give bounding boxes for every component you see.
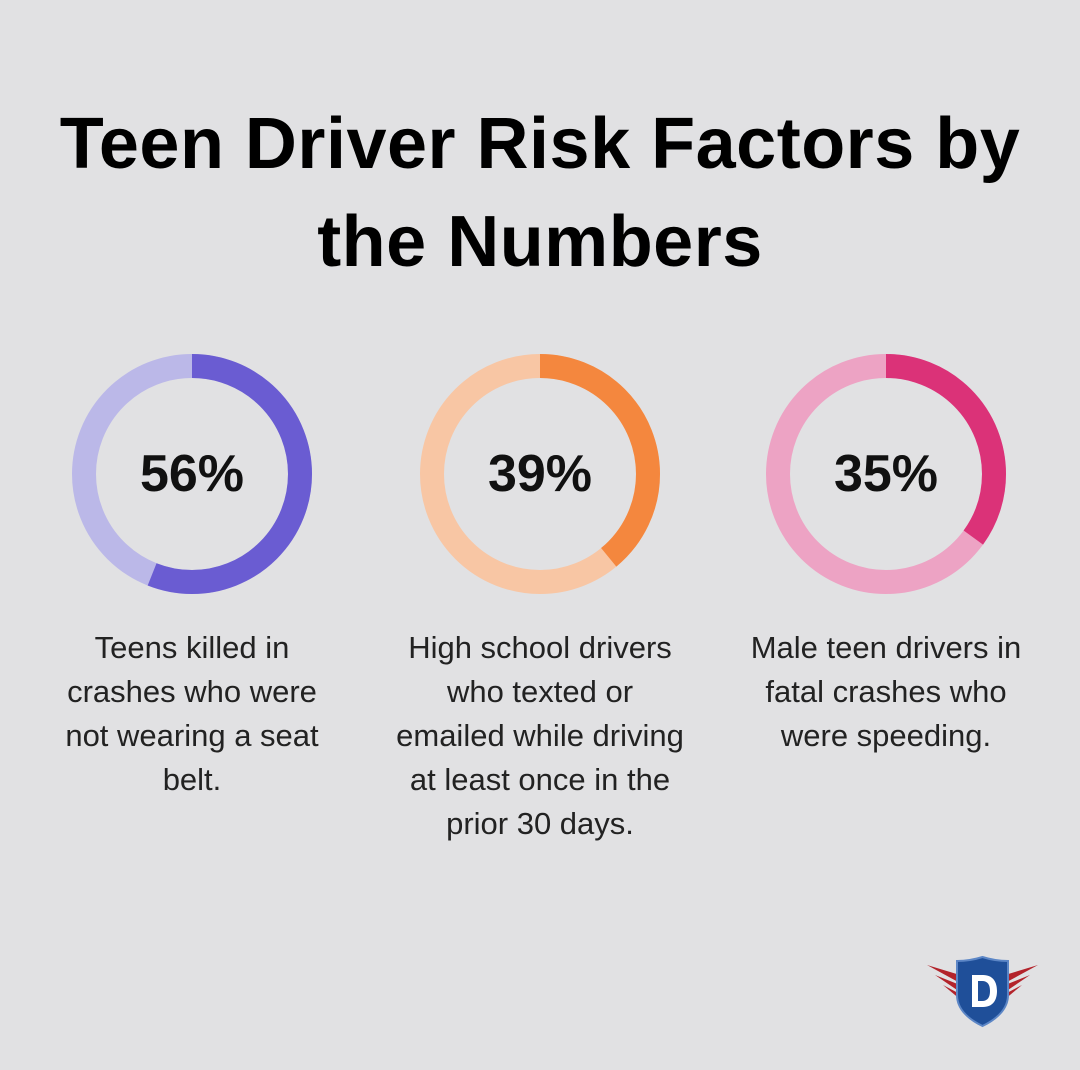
title: the Numbers (317, 202, 763, 282)
description: Male teen drivers in (751, 630, 1021, 665)
description: emailed while driving (396, 718, 684, 753)
description: who texted or (447, 674, 633, 709)
donut chart 35% (766, 354, 1006, 594)
description: fatal crashes who (765, 674, 1007, 709)
description (65, 630, 319, 797)
stat: texting (396, 354, 684, 841)
donut chart 56%: 56% (140, 445, 244, 503)
donut chart 39%: 39% (488, 445, 592, 503)
description: Teens killed in (95, 630, 289, 665)
stat: seat belt (65, 354, 319, 797)
stat: speeding (751, 354, 1021, 753)
description: belt. (163, 762, 221, 797)
description: prior 30 days. (446, 806, 634, 841)
description: crashes who were (67, 674, 317, 709)
description: at least once in the (410, 762, 670, 797)
donut chart 35%: 35% (834, 445, 938, 503)
description (396, 630, 684, 841)
description: were speeding. (781, 718, 991, 753)
description: not wearing a seat (65, 718, 319, 753)
description: High school drivers (408, 630, 672, 665)
title (60, 104, 1020, 282)
donut chart 56% (72, 354, 312, 594)
title: Teen Driver Risk Factors by (60, 104, 1020, 184)
description (751, 630, 1021, 753)
donut chart 39% (420, 354, 660, 594)
logo: shield with wings (927, 956, 1038, 1028)
